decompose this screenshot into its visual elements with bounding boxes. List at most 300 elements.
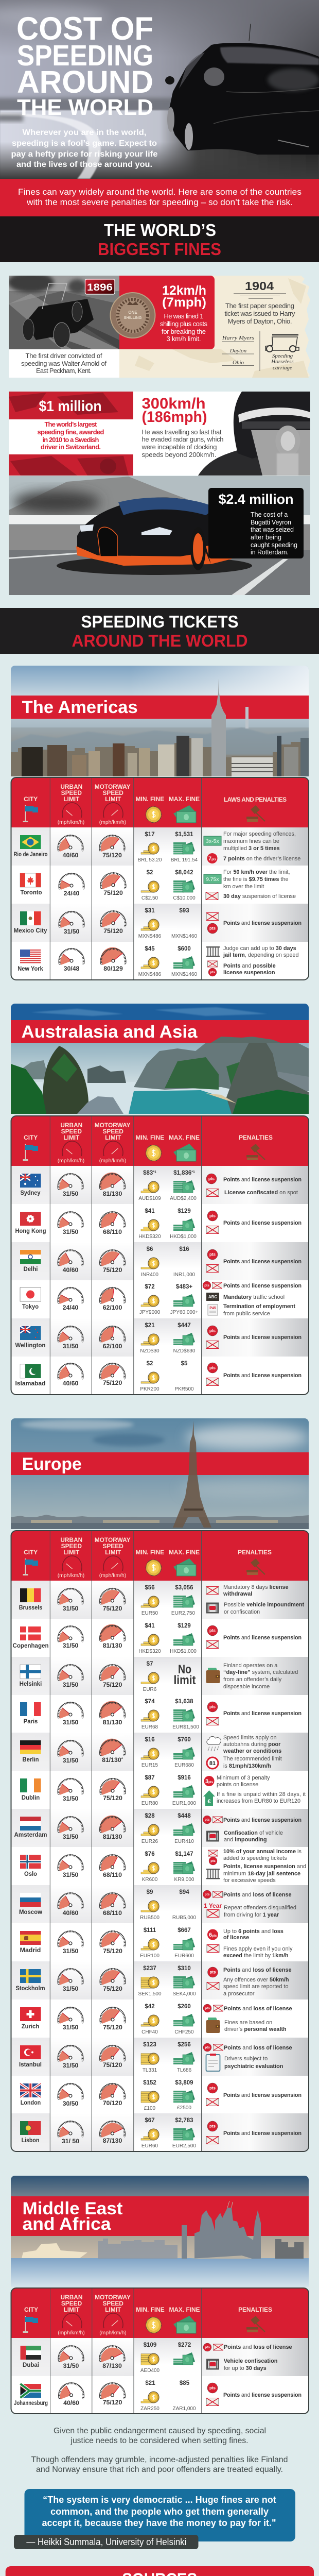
- text: social justice: Given the public endangerment caused by speeding, social: [54, 2427, 266, 2435]
- penalties: or confiscation: [224, 1609, 260, 1615]
- red title band: [11, 1452, 309, 1475]
- intro red band: [0, 179, 319, 216]
- flag: United Arab Emirates: [21, 2346, 41, 2360]
- maximum fine: $667: [178, 1927, 191, 1934]
- motorway speed gauge: [100, 2007, 126, 2031]
- callout: quote: accept it, because they have the money to pay for it.": [42, 2518, 276, 2528]
- urban speed gauge: 40/60: [63, 1266, 79, 1274]
- panel: 300 km/h: [133, 392, 310, 476]
- maximum fine: [171, 946, 197, 977]
- heading: speeding tickets around the world: SPEEDING TICKETS: [81, 612, 239, 631]
- minimum fine: EUR60: [141, 2143, 158, 2149]
- motorway speed gauge: 81/130: [102, 1756, 121, 1764]
- flag: Germany: [20, 1740, 41, 1754]
- flag: Belgium: [20, 1588, 41, 1602]
- penalties: 9.75x: [206, 877, 219, 883]
- ticket handwriting: Speeding: [272, 353, 293, 359]
- text: social justice: and Norway ensure that rich and poor offenders are treated equally.: [36, 2465, 283, 2474]
- penalties: Any offences over 50km/h: [223, 1977, 289, 1983]
- minimum fine: [138, 832, 162, 863]
- maximum fine: [173, 870, 196, 901]
- penalties: Mandatory traffic school: [223, 1294, 285, 1300]
- text: evaded radar guns: were incapable of clocking: [141, 443, 217, 451]
- minimum fine: SEK1,500: [138, 1991, 162, 1997]
- title: Australasia and Asia: Australasia and Asia: [22, 1022, 198, 1042]
- flag: South Africa: [21, 2384, 41, 2398]
- flag: Sweden: [20, 1969, 41, 1983]
- urban speed gauge: 31/50: [63, 1681, 79, 1688]
- penalties: Points and license suspension: [223, 1259, 302, 1265]
- city name: Toronto: [21, 890, 42, 896]
- photo: Paris skyline: [11, 1418, 314, 1529]
- city name: Helsinki: [20, 1681, 42, 1687]
- minimum fine: EUR50: [141, 1611, 158, 1616]
- maximum fine: CHF250: [174, 2029, 194, 2035]
- maximum fine: [173, 1927, 195, 1959]
- urban speed gauge: [58, 1893, 83, 1917]
- penalties: Points and license suspension: [223, 1283, 302, 1289]
- motorway speed gauge: 75/120: [103, 2399, 122, 2406]
- urban speed gauge: 31/50: [63, 1757, 79, 1764]
- section banner: The Americas: [11, 666, 309, 776]
- urban speed gauge: 40/60: [63, 2399, 79, 2406]
- maximum fine: [171, 908, 197, 939]
- hero intro text: speeding is a fool’s game. Expect to: [12, 139, 157, 148]
- penalties: [203, 2004, 292, 2033]
- hero title: AROUND: [17, 64, 153, 99]
- penalties: [206, 1849, 306, 1884]
- penalties: Mandatory 8 days license: [223, 1584, 289, 1590]
- maximum fine: [172, 1699, 199, 1730]
- text: fined 1 shilling: He was fined 1: [164, 312, 204, 320]
- penalties: Minimum of 3 penalty: [217, 1775, 270, 1781]
- row: Stockholm: [11, 1961, 308, 1999]
- penalties: [206, 1174, 302, 1196]
- flag: Turkey: [20, 2045, 41, 2059]
- maximum fine: [173, 1246, 196, 1278]
- penalties: [207, 1928, 293, 1959]
- heading: 1904: 1904: [245, 279, 274, 293]
- city name: Mexico City: [13, 928, 47, 934]
- ticket handwriting: carriage: [273, 365, 292, 371]
- urban speed gauge: [58, 1817, 83, 1840]
- table header: (mph/km/h): [58, 2330, 85, 2336]
- ticket handwriting: Ohio: [233, 360, 244, 366]
- stat: 12 km/h: (7mph): [162, 295, 206, 310]
- urban speed gauge: [58, 1287, 83, 1311]
- flag: India: [20, 1250, 41, 1264]
- heading: the world's biggest fines: BIGGEST FINES: [98, 240, 221, 259]
- penalties: [206, 1211, 302, 1233]
- minimum fine: MXN$486: [138, 972, 162, 977]
- urban speed gauge: 31/50: [64, 928, 80, 935]
- urban speed gauge: [58, 1778, 83, 1802]
- text: $1 million: driver in Switzerland.: [41, 443, 101, 451]
- callout: $2.4 million: in Rotterdam.: [251, 549, 289, 556]
- maximum fine: $85: [180, 2380, 190, 2386]
- flag: Russia: [20, 1893, 41, 1907]
- penalties: [203, 2043, 292, 2071]
- urban speed gauge: 40/60: [63, 1380, 79, 1387]
- penalties: multiplied 3 or 5 times: [223, 845, 280, 852]
- maximum fine: no limit: limit: [174, 1673, 196, 1687]
- motorway speed gauge: 75/120: [103, 927, 123, 935]
- penalties: The recommended limit: [223, 1756, 282, 1762]
- penalties: Points and license suspension: [223, 920, 302, 926]
- penalties: Points and license suspension: [223, 1710, 302, 1717]
- minimum fine: $2: [147, 870, 153, 876]
- urban speed gauge: 31/50: [63, 2024, 79, 2031]
- penalties: increases from EUR80 to EUR120: [217, 1798, 300, 1804]
- urban speed gauge: [58, 1702, 83, 1726]
- penalties: 1 Year: [204, 1902, 222, 1909]
- maximum fine: [173, 1851, 195, 1883]
- flag: Portugal: [20, 2121, 41, 2135]
- stat: 300 km/h: (186mph): [142, 409, 207, 426]
- table header: LIMIT: [63, 1134, 80, 1141]
- motorway speed gauge: [100, 1588, 126, 1612]
- table header: LAWS AND PENALTIES: [224, 796, 287, 803]
- city name: Brussels: [19, 1605, 42, 1611]
- motorway speed gauge: 68/110: [103, 1228, 122, 1235]
- text: evaded radar guns: [141, 428, 223, 459]
- penalties: added to speeding tickets: [223, 1855, 287, 1861]
- penalties: from an offender’s daily: [223, 1676, 282, 1683]
- table header: MIN. FINE: [136, 2306, 165, 2313]
- urban speed gauge: [58, 1250, 83, 1274]
- minimum fine: CHF40: [141, 2029, 158, 2035]
- penalties: minimum 18-day jail sentence: [223, 1871, 300, 1877]
- row: Helsinki: [11, 1657, 308, 1695]
- urban speed gauge: 31/50: [63, 1947, 79, 1955]
- flag: Switzerland: [20, 2007, 41, 2021]
- maximum fine: HKD$1,000: [170, 1649, 197, 1654]
- urban speed gauge: 31/50: [63, 1228, 79, 1235]
- minimum fine: [141, 2042, 159, 2073]
- maximum fine: BRL 191.54: [171, 857, 198, 863]
- penalties: 81: [209, 1760, 216, 1767]
- table header: LIMIT: [63, 795, 80, 803]
- table header: CITY: [24, 795, 38, 803]
- table header: MOTORWAY: [95, 783, 131, 790]
- motorway speed gauge: 75/120: [103, 2024, 122, 2031]
- row: Tokyo: [20, 1281, 302, 1317]
- hero title: SPEEDING: [17, 39, 153, 72]
- penalties: [206, 1663, 298, 1690]
- maximum fine: EUR$1,500: [172, 1724, 199, 1730]
- maximum fine: EUR2,500: [172, 2143, 197, 2149]
- penalties: [206, 945, 299, 976]
- minimum fine: JPY9000: [139, 1310, 161, 1315]
- table header: SPEED: [103, 1128, 123, 1135]
- callout: $2.4 million: The cost of a: [251, 511, 288, 518]
- row: Wellington: [11, 1318, 308, 1357]
- red title band: [11, 1020, 309, 1043]
- motorway speed gauge: [100, 1624, 126, 1649]
- urban speed gauge: [58, 2083, 83, 2107]
- penalties: for up to 30 days: [224, 2365, 267, 2371]
- penalties: and impounding: [224, 1837, 267, 1843]
- penalties: [203, 1816, 302, 1843]
- maximum fine: $16: [179, 1246, 189, 1252]
- penalties: [206, 2121, 302, 2144]
- table header: MIN. FINE: [136, 1134, 164, 1141]
- row: Madrid: [20, 1927, 293, 1959]
- heading: sources: [6, 2566, 314, 2576]
- row: Berlin: [11, 1733, 308, 1771]
- maximum fine: EUR600: [174, 1953, 194, 1959]
- penalties: Confiscation of vehicle: [224, 1830, 283, 1836]
- minimum fine: [141, 870, 159, 901]
- row: Rio de Janeiro: [11, 827, 308, 866]
- minimum fine: [139, 1284, 161, 1315]
- urban speed gauge: 31/50: [63, 1719, 79, 1726]
- maximum fine: EUR2,750: [171, 1611, 196, 1616]
- maximum fine: [172, 1965, 196, 1997]
- maximum fine: no limit: No: [178, 1663, 191, 1676]
- table header: (mph/km/h): [58, 1573, 84, 1579]
- maximum fine: [170, 1208, 197, 1240]
- table header: SPEED: [61, 2300, 82, 2307]
- minimum fine: PKR200: [140, 1386, 160, 1392]
- penalties: is 81mph/130km/h: [223, 1763, 271, 1769]
- urban speed gauge: [58, 2045, 83, 2069]
- penalties: psychiatric evaluation: [224, 2063, 283, 2070]
- minimum fine: [140, 2342, 160, 2374]
- caption: Walter Arnold: East Peckham, Kent.: [36, 367, 92, 375]
- intro red band: Fines can vary widely around the world. Here are some of the countries: [18, 187, 302, 197]
- text: fined 1 shilling: [160, 312, 208, 343]
- minimum fine: $17: [145, 832, 155, 838]
- minimum fine: [140, 1361, 160, 1392]
- row: Mexico City: [11, 904, 308, 942]
- motorway speed gauge: [100, 1855, 126, 1878]
- urban speed gauge: [59, 2383, 84, 2406]
- city name: Stockholm: [15, 1986, 45, 1992]
- maximum fine: [173, 2080, 195, 2111]
- table header: SPEED: [103, 789, 123, 796]
- motorway speed gauge: 75/120: [103, 1605, 122, 1612]
- city name: Johannesburg: [14, 2400, 48, 2406]
- row: Hong Kong: [15, 1208, 302, 1240]
- maximum fine: [172, 2380, 196, 2412]
- flag: Finland: [20, 1665, 41, 1679]
- minimum fine: $109: [144, 2342, 156, 2348]
- landmark: Eiffel Tower: [173, 1421, 211, 1528]
- title: The Americas: The Americas: [22, 698, 138, 717]
- penalties: speed limit are reported to: [223, 1984, 289, 1990]
- callout: $2.4 million: after being: [251, 534, 281, 541]
- maximum fine: $1,836: [173, 1170, 191, 1176]
- minimum fine: £100: [144, 2106, 156, 2111]
- penalties: [206, 1702, 302, 1725]
- minimum fine: [140, 2380, 160, 2412]
- city name: New York: [17, 966, 43, 972]
- city name: Lisbon: [22, 2138, 39, 2144]
- urban speed gauge: 31/50: [63, 1795, 79, 1802]
- motorway speed gauge: 75/120: [103, 889, 123, 896]
- text: $1 million: in 2010 to a Swedish: [42, 436, 99, 444]
- motorway speed gauge: [100, 911, 126, 935]
- section banner: Middle East and Africa: [11, 2176, 309, 2287]
- quote attribution: — Heikki Summala, University of Helsinki: [26, 2537, 186, 2547]
- penalties: Points and license suspension: [223, 1334, 302, 1341]
- maximum fine: TL686: [177, 2067, 192, 2073]
- penalties: 3pts: [205, 1778, 214, 1785]
- minimum fine: $45: [145, 946, 155, 952]
- urban speed gauge: 40/60: [63, 852, 79, 859]
- row: Dubai: [11, 2338, 308, 2376]
- urban speed gauge: [59, 948, 84, 972]
- penalties: For 50 km/h over the limit,: [223, 869, 290, 875]
- city name: Hong Kong: [15, 1228, 46, 1234]
- penalties: [204, 831, 300, 863]
- maximum fine: $600: [178, 946, 191, 952]
- penalties: from driving for 1 year: [224, 1912, 279, 1918]
- penalties: Fines apply even if you only: [223, 1946, 293, 1952]
- penalties: license suspension: [223, 970, 275, 976]
- motorway speed gauge: [100, 1969, 126, 1992]
- landmark: Empire State Building: [211, 679, 249, 776]
- penalties: [203, 2343, 292, 2371]
- table header: CITY: [24, 1549, 38, 1556]
- urban speed gauge: 31/50: [63, 2362, 79, 2369]
- maximum fine: HKD$1,000: [170, 1234, 197, 1240]
- city name: Rio de Janeiro: [13, 852, 47, 858]
- motorway speed gauge: 87/130: [103, 2137, 122, 2144]
- minimum fine: [141, 2004, 159, 2035]
- minimum fine: EUR15: [141, 1762, 158, 1768]
- minimum fine: [141, 1246, 159, 1278]
- flag: Australia: [20, 1174, 41, 1188]
- minimum fine: [138, 1965, 162, 1997]
- motorway speed gauge: 81/130: [103, 1642, 122, 1649]
- minimum fine: $41: [145, 1623, 155, 1629]
- minimum fine: [138, 946, 162, 977]
- text: $1 million: The world’s largest: [44, 420, 97, 428]
- maximum fine: $260: [178, 2004, 191, 2010]
- minimum fine: [138, 1623, 161, 1654]
- penalties: km over the limit: [223, 884, 264, 890]
- motorway speed gauge: [100, 873, 126, 896]
- minimum fine: $41: [145, 1208, 155, 1214]
- table header: (mph/km/h): [58, 1158, 84, 1164]
- table header: (mph/km/h): [58, 820, 84, 825]
- row: Delhi: [11, 1242, 308, 1280]
- penalties: [204, 869, 296, 900]
- city name: Madrid: [20, 1947, 41, 1954]
- city name: Moscow: [19, 1909, 42, 1916]
- table frame: The Americas: [11, 777, 309, 980]
- maximum fine: £2500: [177, 2105, 191, 2111]
- label: 1896: 1896: [87, 282, 113, 293]
- text: first paper ticket: ticket was issued to Harry: [224, 310, 295, 317]
- motorway speed gauge: [100, 1893, 126, 1917]
- photo: Dubai skyline: [11, 2176, 309, 2287]
- penalties: ABC: [208, 1295, 217, 1299]
- minimum fine: HKD$320: [138, 1649, 161, 1654]
- minimum fine: $31: [145, 908, 155, 914]
- minimum fine: [140, 1889, 160, 1921]
- maximum fine: INR1,000: [173, 1272, 196, 1278]
- maximum fine: $3,809: [175, 2080, 193, 2086]
- penalties: [203, 1281, 302, 1317]
- penalties: of license: [223, 1935, 249, 1941]
- photo: Halong Bay: [11, 1004, 309, 1114]
- row: London: [20, 2080, 302, 2111]
- motorway speed gauge: [100, 1931, 126, 1955]
- row: Johannesburg: [14, 2380, 302, 2412]
- maximum fine: $483+: [176, 1284, 192, 1290]
- city name: Amsterdam: [14, 1832, 47, 1838]
- maximum fine: MXN$1460: [171, 934, 197, 939]
- motorway speed gauge: 75/120: [103, 1794, 122, 1802]
- urban speed gauge: 31/50: [63, 1833, 79, 1840]
- row: Brussels: [11, 1581, 308, 1619]
- intro red band: with the most severe penalties for speeding – so don’t take the risk.: [26, 197, 293, 207]
- motorway speed gauge: [100, 1701, 126, 1726]
- city name: Istanbul: [19, 2062, 42, 2068]
- table header: PENALTIES: [238, 1549, 272, 1556]
- table header: URBAN: [61, 2294, 82, 2301]
- maximum fine: EUR680: [174, 1762, 194, 1768]
- table frame: Europe: [11, 1531, 309, 2151]
- table header: MOTORWAY: [95, 2294, 131, 2301]
- minimum fine: $76: [145, 1851, 155, 1857]
- penalties: 7 points on the driver’s license: [223, 856, 300, 862]
- penalties: [206, 1249, 302, 1273]
- urban speed gauge: 31/50: [63, 1642, 79, 1649]
- penalties: Points and license suspension: [223, 1372, 302, 1379]
- text: social justice: [31, 2427, 288, 2474]
- caption: Walter Arnold: The first driver convicted of: [26, 352, 102, 360]
- penalties: Points and loss of license: [224, 2045, 292, 2051]
- motorway speed gauge: [100, 2383, 126, 2406]
- minimum fine: $67: [145, 2117, 155, 2124]
- urban speed gauge: [59, 911, 84, 935]
- penalties: maximum fines can be: [223, 838, 279, 844]
- maximum fine: $5: [181, 1361, 188, 1367]
- flag: Denmark: [20, 1626, 41, 1640]
- minimum fine: KR600: [142, 1877, 158, 1883]
- motorway speed gauge: [100, 1816, 126, 1840]
- icon: one shilling coin: [110, 293, 155, 338]
- hero intro text: and the lives of those around you.: [16, 160, 152, 169]
- penalties: 30 day suspension of license: [223, 893, 296, 900]
- maximum fine: MXN$1460: [171, 972, 197, 977]
- penalties: Points and license suspension: [223, 1817, 302, 1823]
- maximum fine: [172, 1775, 197, 1806]
- urban speed gauge: [58, 1363, 83, 1387]
- photo: vintage car: [8, 272, 119, 349]
- urban speed gauge: [58, 1326, 83, 1350]
- maximum fine: $916: [178, 1775, 191, 1781]
- text: fined 1 shilling: 3 km/h limit.: [167, 335, 201, 343]
- table header: SPEED: [61, 1543, 82, 1550]
- title: Europe: Europe: [22, 1454, 82, 1474]
- minimum fine: $72: [145, 1284, 155, 1290]
- penalties: Possible vehicle impoundment: [224, 1602, 305, 1608]
- penalties: weather or conditions: [223, 1748, 281, 1754]
- motorway speed gauge: 62/100: [103, 1304, 122, 1311]
- motorway speed gauge: 81/130: [103, 1190, 122, 1197]
- urban speed gauge: [58, 1969, 83, 1992]
- urban speed gauge: [58, 1740, 83, 1764]
- motorway speed gauge: [100, 2083, 126, 2107]
- table header: SPEED: [61, 789, 82, 796]
- urban speed gauge: [58, 1665, 83, 1688]
- table header: URBAN: [60, 1122, 82, 1129]
